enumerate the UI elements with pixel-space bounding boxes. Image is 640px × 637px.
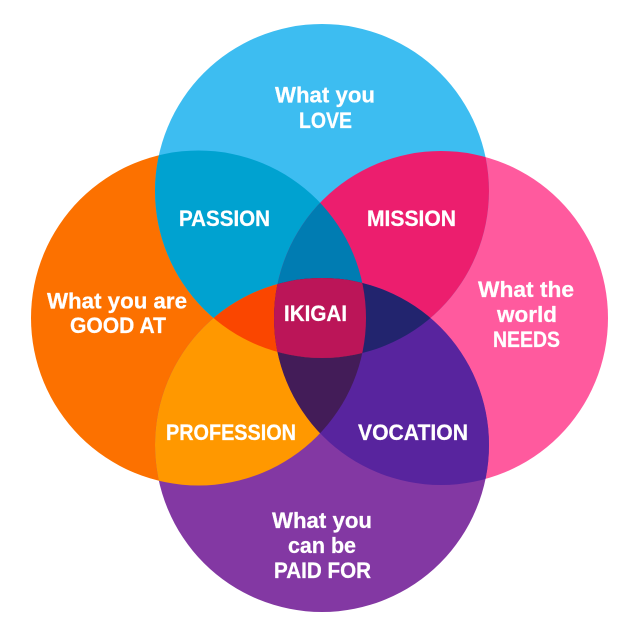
label: what you love: LOVE bbox=[299, 108, 352, 133]
label: what you are good at bbox=[47, 288, 187, 338]
overlap: left inner petal bbox=[214, 278, 362, 358]
circle: what you love bbox=[155, 24, 489, 358]
overlap: profession bbox=[155, 284, 320, 486]
label: what you love: What you bbox=[275, 82, 375, 108]
label: what you are good at: GOOD AT bbox=[70, 313, 167, 338]
circle: what the world needs bbox=[274, 151, 608, 485]
label: what you can be paid for: PAID FOR bbox=[274, 558, 371, 583]
label: what you can be paid for bbox=[272, 508, 372, 583]
label: what the world needs: What the bbox=[478, 277, 574, 302]
label: what you can be paid for: What you bbox=[272, 508, 372, 533]
label: vocation: VOCATION bbox=[358, 420, 468, 445]
overlap: right inner petal bbox=[274, 278, 430, 358]
overlap: bottom inner petal bbox=[278, 278, 362, 433]
label: what you can be paid for: can be bbox=[288, 533, 356, 558]
label: ikigai: IKIGAI bbox=[284, 301, 347, 326]
label: what the world needs: world bbox=[496, 302, 557, 327]
label: what the world needs bbox=[478, 277, 574, 352]
circle: what you are good at bbox=[31, 150, 366, 486]
label: what you love bbox=[275, 82, 375, 133]
overlap: mission bbox=[278, 151, 489, 318]
label: what you are good at: What you are bbox=[47, 288, 187, 314]
label: mission: MISSION bbox=[367, 206, 456, 231]
overlap: vocation bbox=[278, 283, 489, 485]
overlap: ikigai centre bbox=[274, 278, 366, 358]
label: passion: PASSION bbox=[179, 206, 270, 231]
label: profession: PROFESSION bbox=[166, 420, 296, 445]
label: what the world needs: NEEDS bbox=[493, 327, 560, 352]
overlap: top inner petal bbox=[278, 202, 362, 284]
circle: what you can be paid for bbox=[155, 278, 489, 612]
overlap: passion bbox=[155, 150, 320, 318]
